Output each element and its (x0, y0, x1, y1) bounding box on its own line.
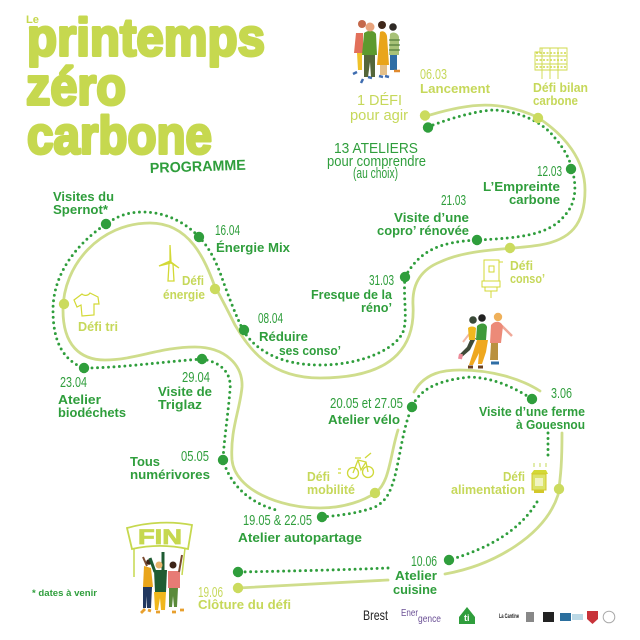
milestone: atelier cuisine: Atelier (395, 568, 437, 583)
milestone: lancement: Lancement (420, 81, 491, 96)
milestone: clôture du défi: Clôture du défi (198, 597, 291, 612)
milestone: visite de triglaz (158, 370, 212, 412)
light milestone dots (59, 110, 564, 593)
milestone: visite d'une ferme: à Gouesnou (516, 417, 585, 432)
milestone: copro rénovée: copro’ rénovée (377, 223, 469, 238)
heading: 1 défi pour agir: pour agir (350, 108, 408, 124)
icon: carbon table (535, 48, 567, 79)
icon: wind turbine (159, 245, 179, 281)
défi bilan carbone: Défi bilan (533, 80, 588, 95)
milestone: tous numérivores (130, 449, 210, 482)
heading: 1 défi pour agir: 1 DÉFI (357, 92, 402, 109)
milestone: tous numérivores: 05.05 (181, 449, 209, 465)
illustration: walking people (460, 313, 512, 367)
milestone: atelier cuisine (393, 554, 437, 597)
milestone: copro rénovée: Visite d’une (394, 210, 469, 225)
heading: 1 défi pour agir (350, 92, 408, 124)
défi énergie: Défi (182, 273, 204, 288)
heading: 13 ateliers: 13 ATELIERS (334, 141, 418, 157)
défi conso: conso’ (510, 271, 545, 286)
milestone: atelier vélo: 20.05 et 27.05 (330, 396, 403, 412)
milestone: visites du spernot: Visites du (53, 189, 114, 204)
milestone: énergie mix (215, 223, 291, 255)
illustration: fin banner with people: FIN (138, 526, 182, 549)
partner logos: gence (418, 614, 441, 625)
milestone: fresque de la réno: réno’ (361, 300, 392, 315)
milestone: fresque de la réno: Fresque de la (311, 287, 393, 302)
milestone: réduire ses conso: Réduire (259, 329, 308, 344)
partner logos: ti (464, 613, 470, 623)
partner logos (363, 607, 615, 625)
milestone: atelier biodéchets: biodéchets (58, 405, 126, 420)
light route: défis (63, 105, 585, 588)
défi bilan carbone: carbone (533, 93, 578, 108)
icon: bicycle (338, 453, 374, 478)
title: zéro (26, 58, 126, 116)
milestone: énergie mix: 16.04 (215, 223, 240, 239)
milestone: réduire ses conso: ses conso’ (279, 343, 341, 358)
défi mobilité (307, 469, 355, 497)
partner logos: La Cantine (499, 614, 519, 620)
partner logos: Brest (363, 607, 388, 623)
milestone: tous numérivores: numérivores (130, 467, 210, 482)
milestone: copro rénovée: 21.03 (441, 193, 466, 209)
milestone: atelier autopartage: 19.05 & 22.05 (243, 513, 312, 529)
milestone: empreinte carbone: L’Empreinte (483, 179, 560, 194)
milestone: atelier biodéchets (58, 375, 126, 420)
milestone: visite de triglaz: Visite de (158, 384, 212, 399)
milestone: empreinte carbone: 12.03 (537, 164, 562, 180)
illustration: fin banner with people (127, 523, 192, 613)
milestone: atelier autopartage: Atelier autopartage (238, 530, 362, 545)
défi alimentation: Défi (503, 469, 525, 484)
défi énergie: énergie (163, 287, 205, 302)
icon: t-shirt (74, 293, 99, 316)
défi tri: Défi tri (78, 319, 118, 334)
milestone: clôture du défi (198, 585, 291, 612)
milestone: fresque de la réno (311, 273, 394, 315)
milestone: visite d'une ferme: Visite d’une ferme (479, 404, 585, 419)
title: printemps (27, 8, 265, 68)
dotted route: ateliers (53, 110, 575, 572)
footnote: * dates à venir (32, 588, 97, 599)
milestone: atelier vélo: Atelier vélo (328, 412, 400, 427)
title: carbone (27, 106, 212, 166)
milestone: atelier cuisine: cuisine (393, 582, 437, 597)
milestone: tous numérivores: Tous (130, 454, 160, 469)
partner logos: Ener (401, 608, 419, 619)
milestone: visite de triglaz: 29.04 (182, 370, 210, 386)
milestone: atelier biodéchets: 23.04 (60, 375, 87, 391)
heading: 13 ateliers (327, 141, 426, 182)
milestone: visites du spernot: Spernot* (53, 202, 109, 217)
milestone: visite d'une ferme: 3.06 (551, 386, 572, 402)
milestone: atelier cuisine: 10.06 (411, 554, 437, 570)
milestone: atelier vélo (328, 396, 403, 427)
défi conso (510, 258, 545, 286)
milestone: énergie mix: Énergie Mix (216, 240, 291, 255)
défi mobilité: Défi (307, 469, 330, 484)
milestone: clôture du défi: 19.06 (198, 585, 223, 601)
milestone: réduire ses conso (258, 311, 341, 358)
milestone: atelier biodéchets: Atelier (58, 392, 101, 407)
heading: 13 ateliers: pour comprendre (327, 154, 426, 170)
dark milestone dots (79, 122, 576, 577)
milestone: atelier autopartage (238, 513, 362, 545)
milestone: empreinte carbone (483, 164, 562, 207)
milestone: réduire ses conso: 08.04 (258, 311, 283, 327)
programme heading: PROGRAMME (150, 158, 246, 177)
défi alimentation: alimentation (451, 482, 525, 497)
icon: food pot (531, 463, 548, 493)
illustration: group of four people (353, 20, 400, 83)
icon: boiler (482, 260, 503, 298)
milestone: empreinte carbone: carbone (509, 192, 560, 207)
milestone: lancement: 06.03 (420, 67, 447, 83)
milestone: visite d'une ferme (479, 386, 585, 432)
heading: 13 ateliers: (au choix) (353, 166, 398, 182)
défi bilan carbone (533, 80, 588, 108)
milestone: copro rénovée (377, 193, 469, 238)
title (26, 8, 265, 166)
milestone: visite de triglaz: Triglaz (158, 397, 203, 412)
défi alimentation (451, 469, 525, 497)
title: Le (26, 14, 39, 26)
milestone: lancement (420, 67, 491, 96)
milestone: visites du spernot (53, 189, 114, 217)
défi énergie (163, 273, 205, 302)
défi mobilité: mobilité (307, 482, 355, 497)
défi conso: Défi (510, 258, 533, 273)
milestone: fresque de la réno: 31.03 (369, 273, 394, 289)
